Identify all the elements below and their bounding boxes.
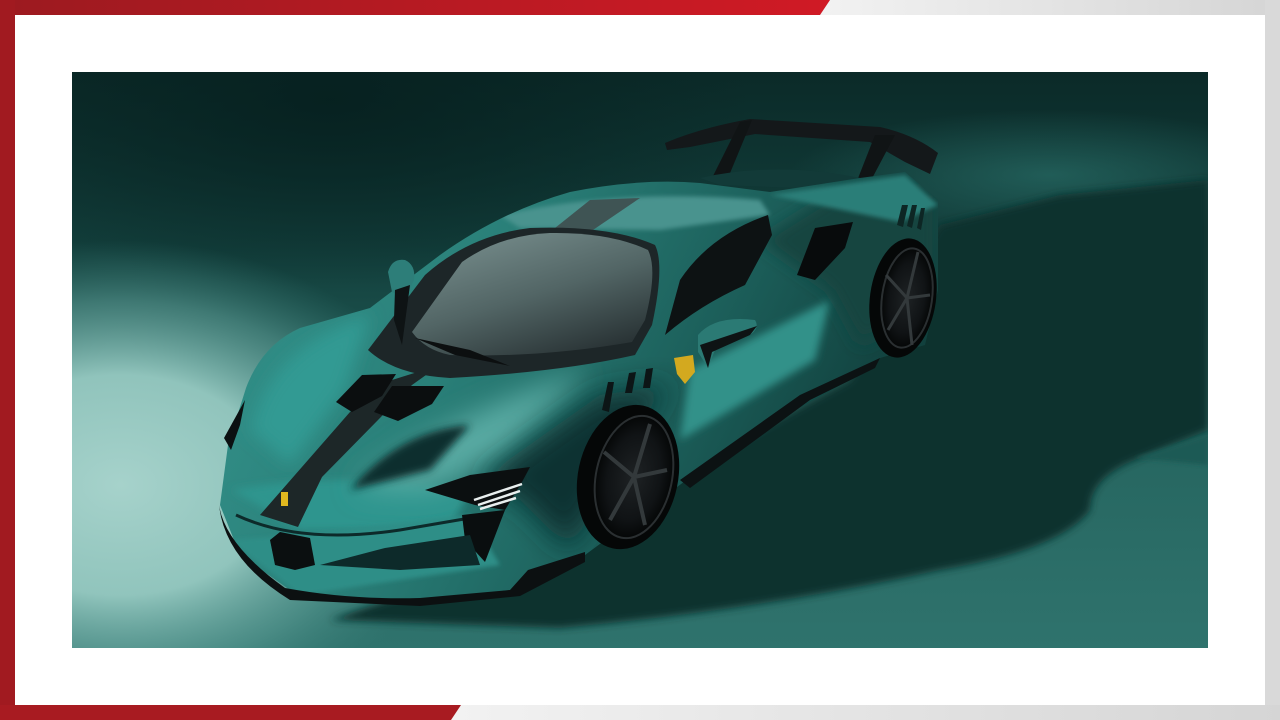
- shield badge: [674, 355, 695, 384]
- wipers: [415, 338, 510, 366]
- light pool on the floor: [72, 253, 364, 648]
- rear wheel: [869, 238, 937, 358]
- dark top wall shading: [139, 76, 522, 228]
- car cast shadow: [330, 180, 1208, 628]
- lit band upper right: [844, 123, 1208, 218]
- front splitter: [219, 505, 585, 606]
- frame: left red band: [0, 0, 15, 720]
- frame: right grey band: [1265, 0, 1280, 720]
- photo backdrop: [72, 72, 1208, 648]
- front grille: [270, 532, 480, 570]
- hood badge: [281, 492, 288, 506]
- fender vents: [602, 368, 653, 412]
- frame: bottom red band: [0, 705, 461, 720]
- rear haunch vents: [897, 205, 925, 230]
- hood vents: [336, 374, 444, 421]
- left headlight: [224, 400, 245, 450]
- headlight: [425, 467, 530, 562]
- right mirror: [698, 319, 757, 368]
- side skirt: [680, 358, 880, 488]
- front crease: [236, 515, 470, 535]
- car: [219, 119, 944, 606]
- side windows: [665, 215, 772, 335]
- rear wing: [665, 119, 938, 178]
- frame: top grey band: [820, 0, 1280, 15]
- frame: bottom grey band: [450, 705, 1280, 720]
- centre racing stripe: [260, 373, 426, 527]
- windscreen: [368, 228, 659, 378]
- car body: [220, 172, 938, 604]
- frame: top red band: [0, 0, 830, 15]
- body highlights and shadows: [230, 175, 938, 595]
- left mirror: [388, 260, 414, 345]
- front wheel: [576, 404, 680, 550]
- photo: [72, 72, 1208, 648]
